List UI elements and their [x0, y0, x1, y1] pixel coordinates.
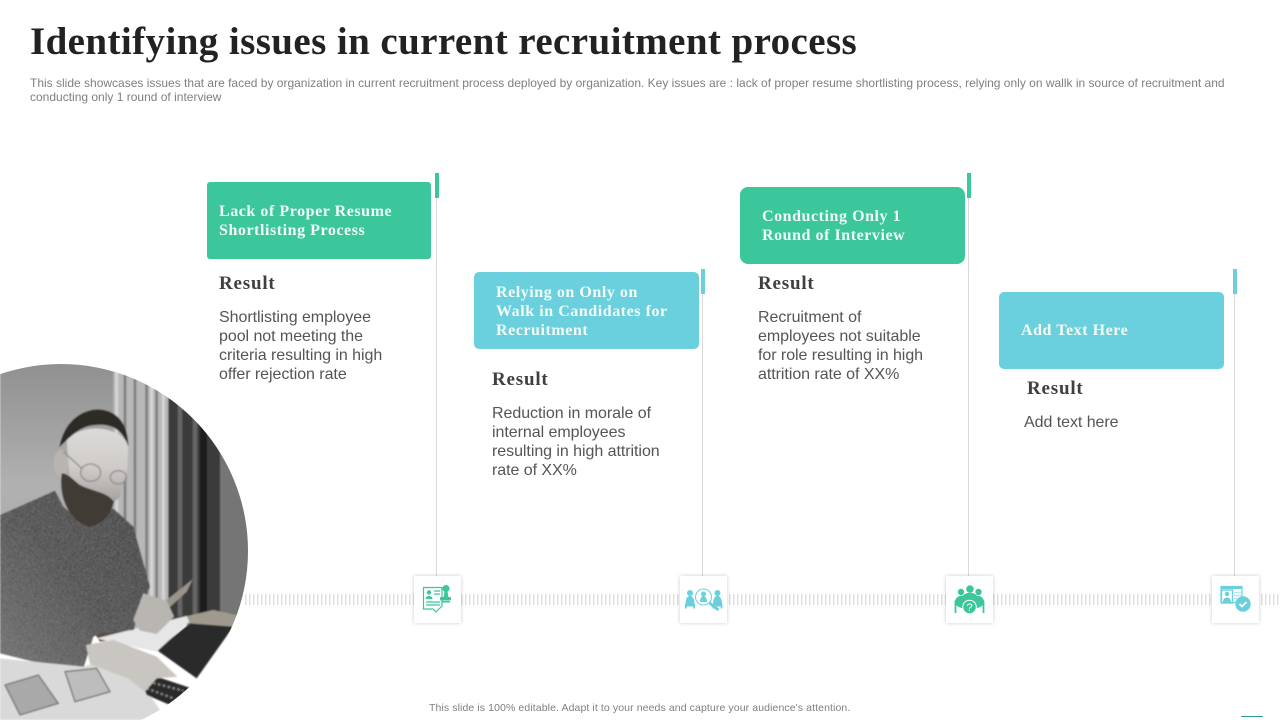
desk with documents	[0, 658, 167, 720]
result text 1: Shortlisting employee	[219, 309, 371, 326]
connector tab 4	[1233, 269, 1237, 294]
result text 4: Add text here	[1024, 414, 1119, 431]
sweater torso and arms	[0, 491, 150, 668]
icon: team meeting with question mark	[946, 576, 993, 623]
result text 1	[219, 309, 382, 383]
lower hand	[86, 640, 177, 692]
result heading 4: Result	[1027, 378, 1084, 399]
result heading 3: Result	[758, 273, 815, 294]
glasses	[63, 452, 126, 484]
dark laptop	[157, 623, 233, 678]
timeline tick band	[245, 594, 1280, 605]
result text 3: employees not suitable	[758, 328, 921, 345]
connector line 3	[968, 173, 969, 576]
result text 3: for role resulting in high	[758, 347, 923, 364]
title: Identifying issues in current recruitment process	[30, 20, 857, 63]
corner accent	[1241, 716, 1263, 717]
connector line 1	[436, 173, 437, 576]
result text 2: resulting in high attrition	[492, 443, 660, 460]
hair	[59, 409, 128, 447]
banknote 1	[5, 675, 58, 715]
result text 2: Reduction in morale of	[492, 405, 651, 422]
connector line 4	[1234, 269, 1235, 576]
back desk	[186, 609, 236, 627]
result text 1: pool not meeting the	[219, 328, 363, 345]
panel: issue 3 header	[740, 187, 965, 264]
panel: issue 3 header: Round of Interview	[762, 227, 905, 244]
panel: issue 1 header: Lack of Proper Resume	[219, 203, 392, 220]
panel: issue 2 header: Relying on Only on	[496, 284, 638, 301]
icon: team meeting with question mark: ?	[966, 602, 973, 614]
result text 1: criteria resulting in high	[219, 347, 382, 364]
result text 3: Recruitment of	[758, 309, 861, 326]
result text 3	[758, 309, 923, 383]
icon: profile page with check badge	[1212, 576, 1259, 623]
result heading 2: Result	[492, 369, 549, 390]
connector tab 3	[967, 173, 971, 198]
curtains	[113, 360, 170, 637]
panel: issue 2 header: Walk in Candidates for	[496, 303, 668, 320]
wall	[0, 364, 114, 516]
connector tab 2	[701, 269, 705, 294]
panel: issue 1 header	[207, 182, 431, 259]
beard	[61, 473, 114, 527]
note in raised hand	[166, 579, 193, 608]
subtitle description: This slide showcases issues that are faced by organization in current recruitment process deployed by organization. Key issues are : lack of proper resume shortlisting process, relying only on wallk in source of recruitment and	[30, 76, 1225, 90]
photo: man working with calculator in circular crop	[0, 364, 248, 720]
ear	[54, 449, 68, 477]
panel: issue 2 header: Recruitment	[496, 322, 588, 339]
result text 2: rate of XX%	[492, 462, 577, 479]
footer note: This slide is 100% editable. Adapt it to your needs and capture your audience's attention.	[429, 702, 850, 714]
calculator	[144, 677, 190, 705]
raised hand	[133, 593, 174, 634]
banknote 2	[65, 668, 110, 702]
result text 2	[492, 405, 660, 479]
white paper	[97, 616, 189, 652]
panel: issue 2 header	[474, 272, 699, 349]
result heading 1: Result	[219, 273, 276, 294]
panel: issue 4 header: Add Text Here	[1021, 322, 1128, 339]
icon: resume with stamp	[414, 576, 461, 623]
panel: issue 1 header: Shortlisting Process	[219, 222, 365, 239]
face	[67, 429, 128, 507]
subtitle description	[30, 76, 1225, 104]
connector tab 1	[435, 173, 439, 198]
result text 3: attrition rate of XX%	[758, 366, 899, 383]
connector line 2	[702, 269, 703, 576]
panel: issue 3 header: Conducting Only 1	[762, 208, 901, 225]
panel: issue 4 header	[999, 292, 1224, 369]
result text 2: internal employees	[492, 424, 625, 441]
subtitle description: conducting only 1 round of interview	[30, 90, 221, 104]
result text 1: offer rejection rate	[219, 366, 347, 383]
icon: candidates under magnifier	[680, 576, 727, 623]
